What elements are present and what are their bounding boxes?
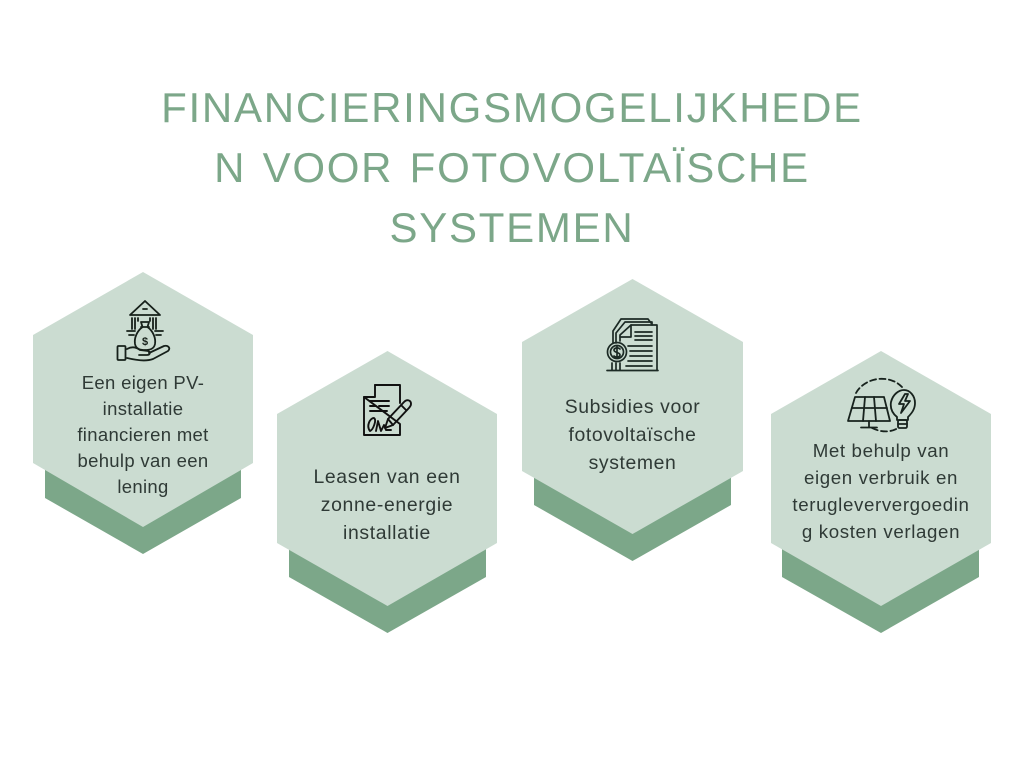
text: card 4: terugleververgoedin [792,494,970,515]
text: card 1: behulp van een [77,450,208,471]
text: card 3: Subsidies voor [565,396,700,418]
text: card 4: Met behulp van [813,440,949,461]
text: card 4: g kosten verlagen [802,521,960,542]
text: card 3: systemen [589,452,676,474]
text: card 1: Een eigen PV- [82,372,204,393]
text: card 3: fotovoltaïsche [568,424,697,446]
title: N VOOR FOTOVOLTAÏSCHE [214,144,810,191]
text: card 1 [77,372,209,497]
title [161,84,863,251]
text: card 3 [565,396,700,474]
text: card 2: installatie [343,522,431,544]
text: card 4 [792,440,970,542]
text: card 2: Leasen van een [313,466,461,488]
text: card 1: installatie [103,398,183,419]
hexagon card 4 [771,351,991,633]
text: card 2 [313,466,461,544]
title: FINANCIERINGSMOGELIJKHEDE [161,84,863,131]
icon: solar panel and light bulb [848,379,915,431]
icon: bank, money bag and hand [118,301,169,361]
icon: documents with dollar coin [607,319,658,370]
text: card 1: lening [117,476,169,497]
hexagon card 2 [277,351,497,633]
hexagon card 1 [33,272,253,554]
text: card 2: zonne-energie [321,494,453,516]
icon: signed contract with pen [364,385,411,435]
text: card 1: financieren met [77,424,209,445]
text: card 4: eigen verbruik en [804,467,958,488]
icon: bank, money bag and hand: $ [142,336,148,348]
title: SYSTEMEN [389,204,635,251]
hexagon card 3 [522,279,743,561]
